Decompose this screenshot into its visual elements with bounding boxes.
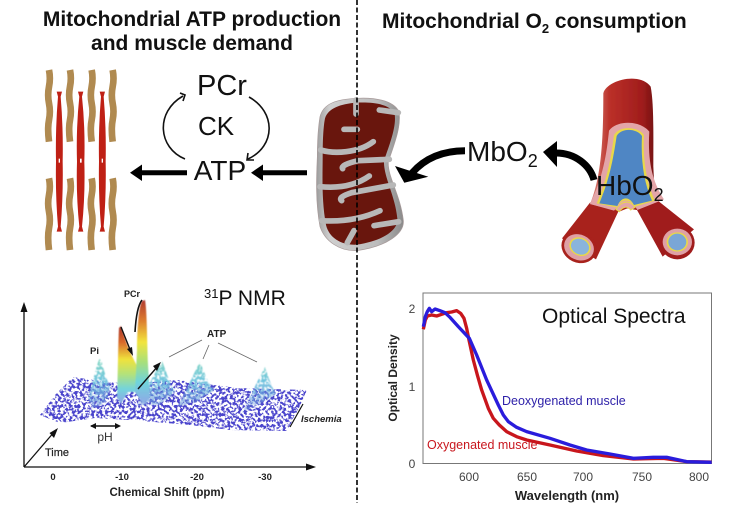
right branch <box>637 198 694 257</box>
right lumen <box>660 226 695 259</box>
NMR labels: 0 <box>50 472 56 483</box>
NMR labels: Pi <box>90 346 99 357</box>
chart: 31P NMR spectrum <box>20 289 342 499</box>
label: pH: pH <box>97 430 113 444</box>
peak: ATP <box>137 361 276 413</box>
NMR labels: Chemical Shift (ppm) <box>109 487 225 499</box>
NMR labels <box>45 289 342 499</box>
plot frame <box>423 293 712 464</box>
tick labels: 2 <box>409 302 416 316</box>
chart: optical spectra <box>386 293 712 503</box>
label: ATP: ATP <box>194 155 246 186</box>
tick labels: 800 <box>689 470 709 484</box>
NMR labels: -20 <box>190 472 204 483</box>
x axis title: Wavelength (nm) <box>515 488 619 503</box>
divider: dashed centre line <box>356 0 358 503</box>
tick labels: 600 <box>459 470 479 484</box>
curve: oxygenated muscle <box>423 311 712 462</box>
axes <box>24 306 310 467</box>
label: HbO2: HbO <box>596 170 654 201</box>
tick labels <box>409 302 709 484</box>
label: PCr: PCr <box>197 70 247 102</box>
title: mitochondrial ATP production: Mitochondrial ATP production <box>43 8 341 31</box>
title: mitochondrial O2 consumption: 2 <box>542 21 549 36</box>
left branch <box>562 203 619 259</box>
left lumen <box>556 226 602 269</box>
arrow: mitochondrion to ATP <box>251 164 307 181</box>
NMR labels: Ischemia <box>301 414 342 425</box>
NMR labels: -30 <box>258 472 272 483</box>
NMR labels: PCr <box>124 289 141 299</box>
tick labels: 650 <box>517 470 537 484</box>
arrow: HbO2 to MbO2 <box>543 141 594 180</box>
label: HbO2: 2 <box>654 185 664 205</box>
icon: artery <box>556 79 695 269</box>
label: MbO2: 2 <box>528 151 538 171</box>
arrow: CK cycle left <box>163 93 185 159</box>
peak: PCr <box>117 300 150 404</box>
label: CK: CK <box>198 111 235 141</box>
curve: deoxygenated muscle <box>423 308 712 462</box>
label: oxygenated muscle: Oxygenated muscle <box>427 438 538 452</box>
icon: muscle sarcomere <box>48 70 113 250</box>
tick labels: 0 <box>409 457 416 471</box>
y axis title: Optical Density <box>386 334 400 422</box>
title: mitochondrial O2 consumption: consumption <box>549 10 687 33</box>
heading: 31P NMR: P NMR <box>218 287 286 310</box>
heading: 31P NMR: 31 <box>204 286 218 301</box>
curves <box>423 308 712 462</box>
annotation arrows <box>91 300 158 426</box>
title: mitochondrial ATP production: and muscle demand <box>91 32 293 55</box>
NMR labels: -10 <box>115 472 129 483</box>
tick labels: 1 <box>409 380 416 394</box>
tick labels: 700 <box>573 470 593 484</box>
label: deoxygenated muscle: Deoxygenated muscle <box>502 394 626 408</box>
icon: mitochondrion <box>317 98 403 251</box>
main vessel <box>590 79 655 212</box>
arrow: ATP to muscle <box>130 164 187 181</box>
title: mitochondrial O2 consumption: Mitochondrial O <box>382 10 542 33</box>
tick labels: 750 <box>632 470 652 484</box>
arrow: CK cycle right <box>247 97 269 160</box>
NMR labels: Time <box>45 447 69 459</box>
waterfall mesh <box>40 377 307 431</box>
peak: Pi <box>88 358 110 408</box>
label: MbO2: MbO <box>467 136 528 167</box>
heading: optical spectra: Optical Spectra <box>542 305 686 328</box>
NMR labels: ATP <box>207 329 227 340</box>
arrow: MbO2 to mitochondrion <box>395 151 465 183</box>
